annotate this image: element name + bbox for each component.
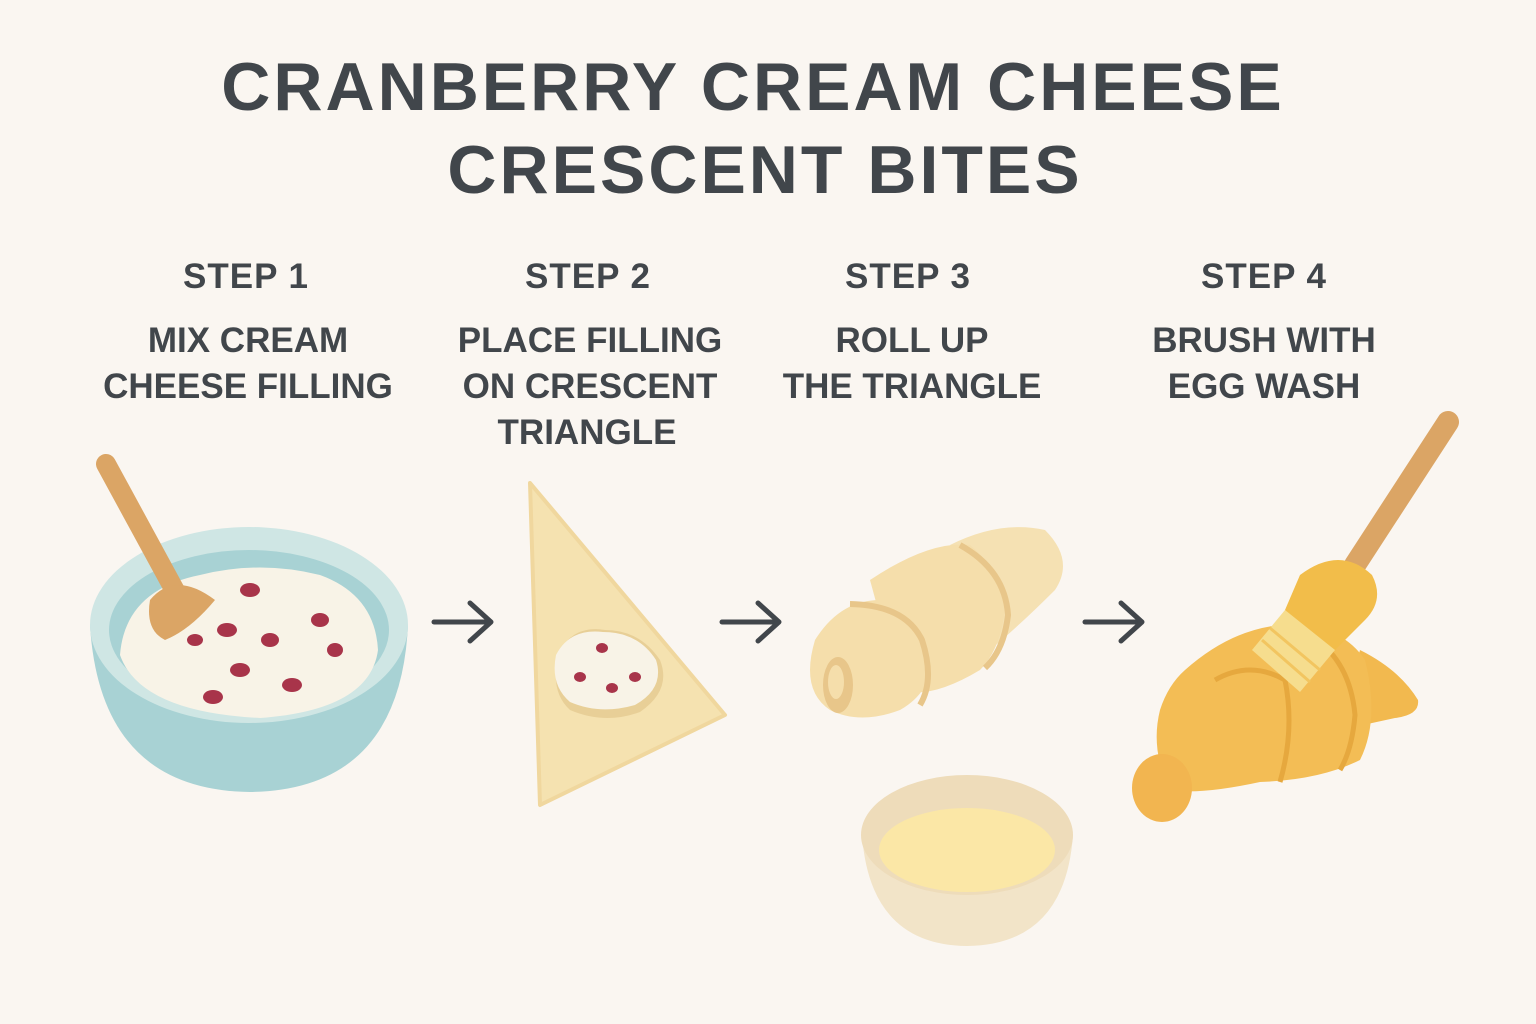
title: CRANBERRY CREAM CHEESE — [221, 49, 1285, 125]
arrow 1 — [434, 603, 491, 641]
icon: mixing bowl with spoon — [90, 464, 408, 792]
step 1 label: MIX CREAM — [148, 321, 348, 360]
step 3 label: THE TRIANGLE — [783, 367, 1041, 406]
icon: croissant with pastry brush — [1132, 422, 1448, 822]
icon: rolled dough — [810, 527, 1063, 718]
step 1 label: STEP 1 — [183, 257, 309, 296]
step 4 label: STEP 4 — [1201, 257, 1327, 296]
step 4 label: BRUSH WITH — [1152, 321, 1376, 360]
arrow 2 — [722, 603, 779, 641]
title — [221, 49, 1285, 208]
step 2 label: STEP 2 — [525, 257, 651, 296]
step 4 label — [1152, 257, 1376, 406]
step 2 label: TRIANGLE — [498, 413, 676, 452]
step 3 label: STEP 3 — [845, 257, 971, 296]
step 2 label: ON CRESCENT — [463, 367, 717, 406]
step 3 label: ROLL UP — [836, 321, 988, 360]
step 2 label — [458, 257, 722, 452]
step 1 label — [103, 257, 393, 406]
step 2 label: PLACE FILLING — [458, 321, 722, 360]
arrow 3 — [1085, 603, 1142, 641]
step 1 label: CHEESE FILLING — [103, 367, 393, 406]
step 3 label — [783, 257, 1041, 406]
icon: egg wash bowl — [861, 775, 1073, 946]
icon: crescent triangle with filling — [530, 483, 725, 805]
title: CRESCENT BITES — [447, 132, 1083, 208]
step 4 label: EGG WASH — [1168, 367, 1360, 406]
